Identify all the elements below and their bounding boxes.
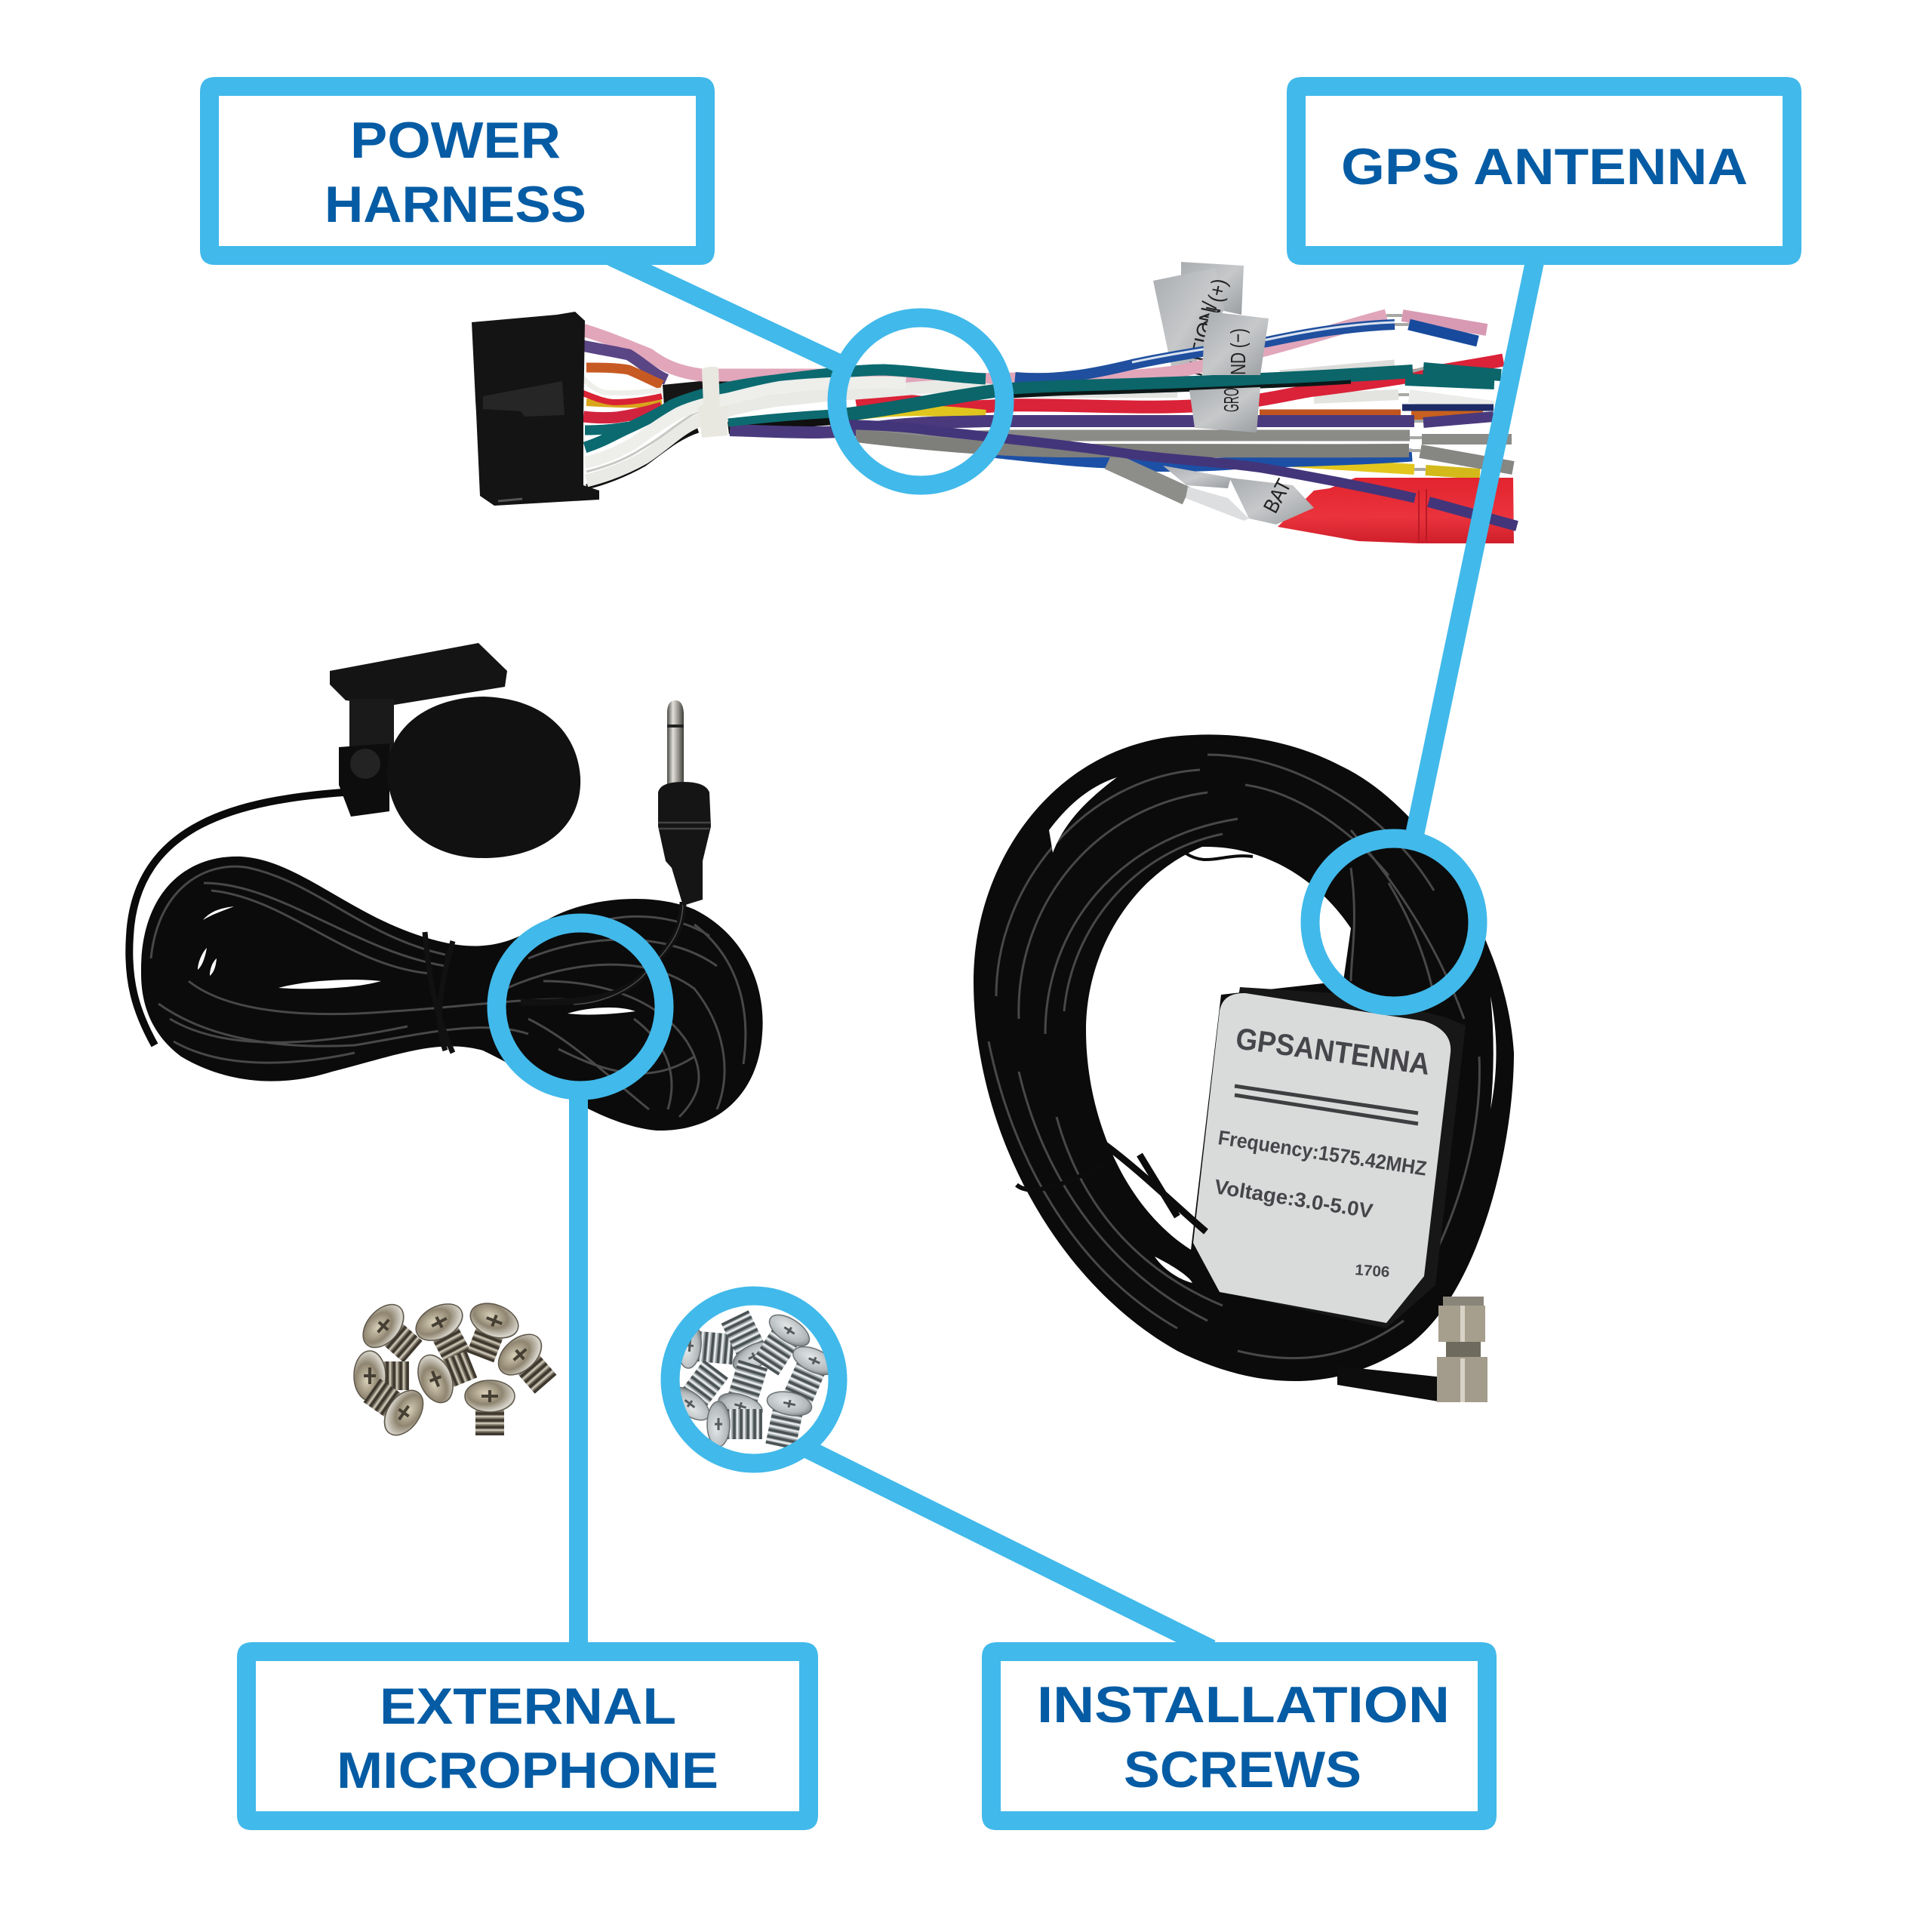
label box — [982, 1642, 1497, 1830]
silver wire tags, front: GRO — [1220, 388, 1243, 412]
leader line — [611, 257, 844, 366]
label text: HARNESS — [325, 176, 586, 233]
silver wire tags, front: ND (−) — [1226, 328, 1250, 375]
silver wire tags, upper: NITION/ — [1183, 300, 1222, 378]
callout: GPS antenna — [1287, 77, 1801, 1006]
label heading: GPSANTENNA — [1234, 1022, 1432, 1081]
photo: external microphone — [129, 643, 763, 1131]
mic stem — [349, 699, 394, 755]
highlight ring — [497, 923, 664, 1091]
SMA connector — [1337, 1297, 1487, 1402]
highlight ring — [670, 1296, 838, 1463]
leader line — [1414, 257, 1536, 840]
cable highlights — [989, 755, 1479, 1358]
frequency text: Frequency:1575.42MHZ — [1217, 1126, 1428, 1180]
callout: external microphone — [237, 923, 818, 1830]
label text: EXTERNAL — [380, 1678, 676, 1735]
antenna module body — [1200, 987, 1466, 1328]
audio jack — [658, 700, 711, 906]
label text: MICROPHONE — [337, 1742, 718, 1799]
coil ties — [425, 932, 453, 1053]
silver wire tags, upper — [1153, 262, 1244, 378]
cut cable ends and tie — [1017, 853, 1253, 1232]
photo: nickel screws — [354, 1297, 565, 1442]
photo: silver screws — [680, 1310, 829, 1447]
batch number: 1706 — [1355, 1262, 1390, 1281]
voltage text: Voltage:3.0-5.0V — [1213, 1175, 1374, 1223]
silver wire tags, front: BAT — [1259, 475, 1296, 517]
label panel — [1193, 993, 1451, 1323]
photo: GPS antenna — [974, 734, 1514, 1402]
leader line — [569, 1096, 588, 1649]
cable coil — [974, 734, 1514, 1381]
clip plate — [330, 643, 507, 706]
foam windscreen — [387, 697, 580, 858]
highlight ring — [1310, 838, 1478, 1006]
label text: SCREWS — [1124, 1741, 1361, 1798]
photo: power harness — [0, 0, 1517, 543]
label box — [237, 1642, 818, 1830]
black connector — [472, 312, 599, 506]
purple wire over connector — [830, 424, 1415, 498]
silver wire tags, upper: ON (+) — [1197, 276, 1231, 337]
callout: power harness — [200, 77, 1004, 485]
label box — [200, 77, 715, 265]
label box — [1287, 77, 1801, 265]
white gaps in coil — [1049, 777, 1117, 853]
callout: installation screws — [670, 1296, 1497, 1830]
cable tie — [698, 367, 728, 438]
wires — [0, 0, 1513, 496]
label text: GPS ANTENNA — [1341, 138, 1748, 195]
label text: INSTALLATION — [1037, 1676, 1450, 1734]
mic cable loop — [129, 792, 343, 1045]
label text: POWER — [350, 112, 561, 169]
thin tail cable — [521, 902, 683, 1002]
silver wire tags, front — [1163, 312, 1314, 525]
cable coil — [141, 857, 763, 1131]
highlight ring — [837, 318, 1004, 485]
red RCA connector — [1278, 478, 1514, 543]
leader line — [808, 1449, 1211, 1649]
